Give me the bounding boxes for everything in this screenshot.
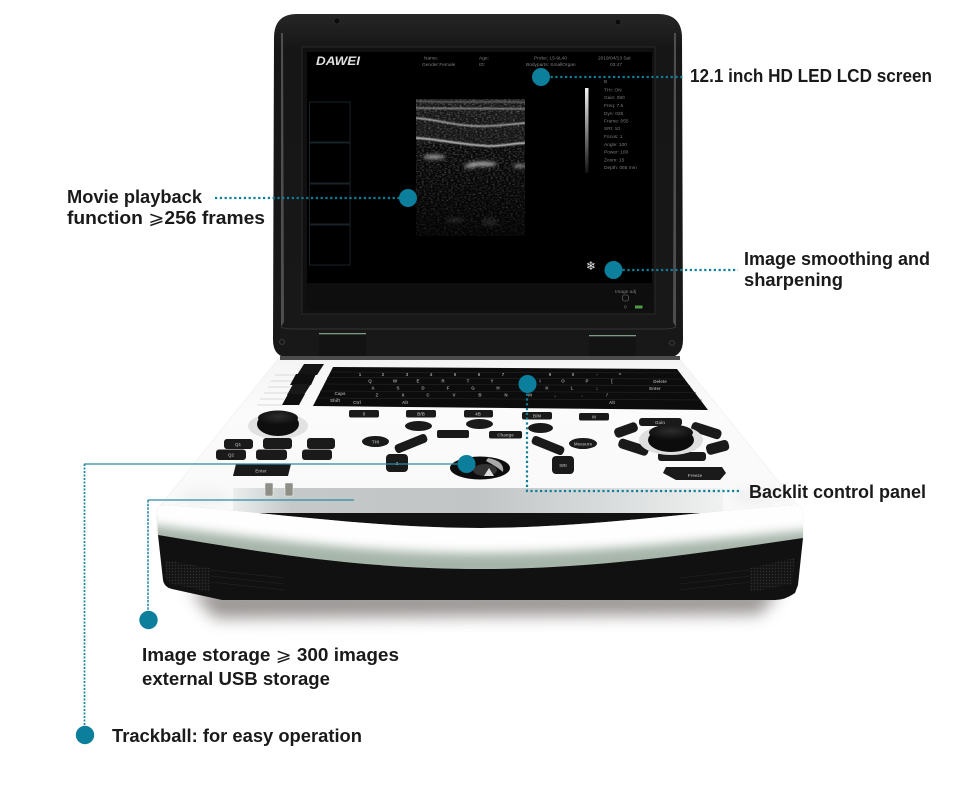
image adjust control (615, 289, 642, 310)
keyboard (313, 367, 708, 410)
control keys: Enter (255, 468, 267, 474)
control keys: Change (497, 432, 514, 438)
key labels: D (421, 386, 425, 390)
base deck (157, 359, 803, 535)
screen header text: 2019/04/13 Sat (598, 56, 631, 62)
key labels: Alt (402, 400, 408, 405)
key labels: E (416, 378, 420, 384)
control keys: Measure (574, 442, 593, 446)
screen header text: 03:47 (610, 62, 622, 68)
image adjust control: Image adj (615, 289, 636, 295)
parameter list: Depth: 055 mm (604, 165, 637, 171)
callout: image storage (139, 500, 399, 689)
callout: movie playback (67, 187, 417, 228)
device: laptop ultrasound scanner (120, 14, 840, 618)
callout: backlit control panel (518, 375, 926, 502)
screen header text: Name: (424, 56, 438, 62)
screen header text: Bodyparts: SmallOrgan (526, 62, 576, 68)
parameter list: THI: ON (604, 88, 622, 94)
parameter list: Power: 100 (604, 150, 629, 156)
key labels: Caps (334, 391, 346, 396)
callout: backlit control panel: Backlit control panel (749, 482, 926, 502)
image adjust control: 0 (624, 304, 627, 310)
base shadow (190, 590, 780, 618)
key labels: Z (376, 392, 379, 398)
callout: image smoothing: sharpening (744, 270, 843, 290)
callout: image storage: Image storage ⩾ 300 images (142, 645, 399, 665)
key labels: 5 (454, 372, 457, 377)
parameter list (604, 79, 637, 171)
parameter list: Frame: 055 (604, 118, 629, 124)
key labels: X (401, 392, 405, 398)
key labels: R (441, 378, 445, 384)
key labels: 9 (549, 372, 552, 377)
key labels: Alt (609, 400, 616, 405)
key labels: Ctrl (353, 400, 361, 405)
parameter list: Angle: 100 (604, 142, 627, 148)
screen header text: Gender:Female (422, 62, 456, 68)
key labels: W (393, 378, 398, 384)
key labels: Y (490, 378, 494, 384)
key labels: 1 (359, 372, 362, 377)
screen logo: DAWEI: DAWEI (316, 54, 361, 68)
vents (165, 558, 795, 592)
key labels: 7 (502, 372, 505, 377)
trackball (450, 456, 510, 480)
control keys: Q2 (228, 452, 234, 458)
ultrasound image (416, 99, 527, 236)
key labels: H (496, 386, 500, 390)
left rotary knob (248, 410, 308, 439)
key labels: K (545, 386, 549, 390)
parameter list: SRI: 10 (604, 126, 620, 132)
control keys: B/B (417, 412, 426, 416)
lid: black display housing (273, 14, 683, 358)
screen header text: Age: (479, 56, 489, 62)
control keys: 5 (363, 412, 366, 416)
control keys: SRI (559, 463, 567, 468)
deck corner shading (181, 490, 779, 503)
key labels: N (504, 392, 508, 398)
screen header text: ID: (479, 62, 485, 68)
callout: trackball: Trackball: for easy operation (112, 726, 362, 746)
lid bottom edge (280, 356, 680, 360)
callout: movie playback: function ⩾256 frames (67, 208, 265, 228)
key labels: O (561, 378, 565, 384)
control keys (216, 410, 730, 480)
key labels: Q (368, 378, 372, 384)
key labels: , (554, 392, 556, 398)
key labels: Enter (649, 386, 661, 391)
front face with USB ports (233, 483, 723, 514)
key labels: F (447, 386, 450, 390)
callout: movie playback: Movie playback (67, 187, 203, 207)
key labels: G (471, 386, 475, 390)
parameter list: Gain: 050 (604, 95, 625, 101)
callout: image smoothing: Image smoothing and (744, 249, 930, 269)
front handle band (157, 505, 803, 569)
freeze snowflake icon: ❄ (586, 259, 596, 273)
callout: 12.1 inch screen: 12.1 inch HD LED LCD screen (690, 66, 932, 86)
key labels: M (528, 392, 532, 398)
right rotary knob (639, 424, 703, 455)
slider cluster (257, 364, 324, 405)
key labels: ; (596, 386, 598, 390)
screen header text: Probe: L5-9L40 (534, 56, 567, 62)
parameter list: Dyn: 028 (604, 111, 624, 117)
key labels: = (619, 372, 622, 377)
carrying slot (255, 513, 725, 528)
key labels: I (539, 378, 541, 384)
control keys: Freeze (688, 473, 703, 478)
control keys: Gain (655, 420, 665, 425)
control keys: THI (372, 440, 379, 444)
thumbnail frames (310, 102, 350, 265)
callout: image storage: external USB storage (142, 669, 330, 689)
key labels: Delete (653, 379, 667, 384)
key labels: V (452, 392, 456, 398)
control keys: 4B (475, 412, 482, 416)
key labels: - (596, 372, 598, 377)
key labels: 0 (572, 372, 575, 377)
key labels: A (371, 386, 375, 390)
key labels: T (467, 378, 470, 384)
key labels: . (581, 392, 583, 398)
parameter list: B (604, 79, 607, 85)
key labels: 6 (478, 372, 481, 377)
key labels: / (606, 392, 608, 398)
key labels: 4 (430, 372, 433, 377)
key labels: S (396, 386, 400, 390)
control keys: B/M (533, 414, 541, 418)
control keys: Q1 (235, 442, 241, 447)
USB slots (265, 483, 293, 496)
key labels: L (571, 386, 574, 390)
key labels: Shift (330, 398, 340, 403)
callout: 12.1 inch screen (532, 66, 932, 86)
key labels: 3 (406, 372, 409, 377)
key labels: B (478, 392, 482, 398)
grayscale bar (585, 88, 588, 173)
parameter list: Zoom: 15 (604, 158, 625, 164)
key labels: [ (611, 378, 613, 384)
key labels: 2 (382, 372, 385, 377)
control keys: 2 (396, 461, 399, 466)
parameter list: Focus: 1 (604, 134, 623, 140)
callout: trackball (76, 455, 476, 746)
control keys: M (592, 414, 596, 420)
key labels: P (585, 378, 589, 384)
screen (307, 52, 652, 310)
key labels: C (426, 392, 430, 398)
hinges (319, 333, 636, 362)
key labels (330, 372, 667, 405)
parameter list: Freq: 7.5 (604, 103, 624, 109)
callout: image smoothing (604, 249, 930, 290)
screen header text (422, 56, 631, 68)
black lower body (158, 530, 803, 600)
